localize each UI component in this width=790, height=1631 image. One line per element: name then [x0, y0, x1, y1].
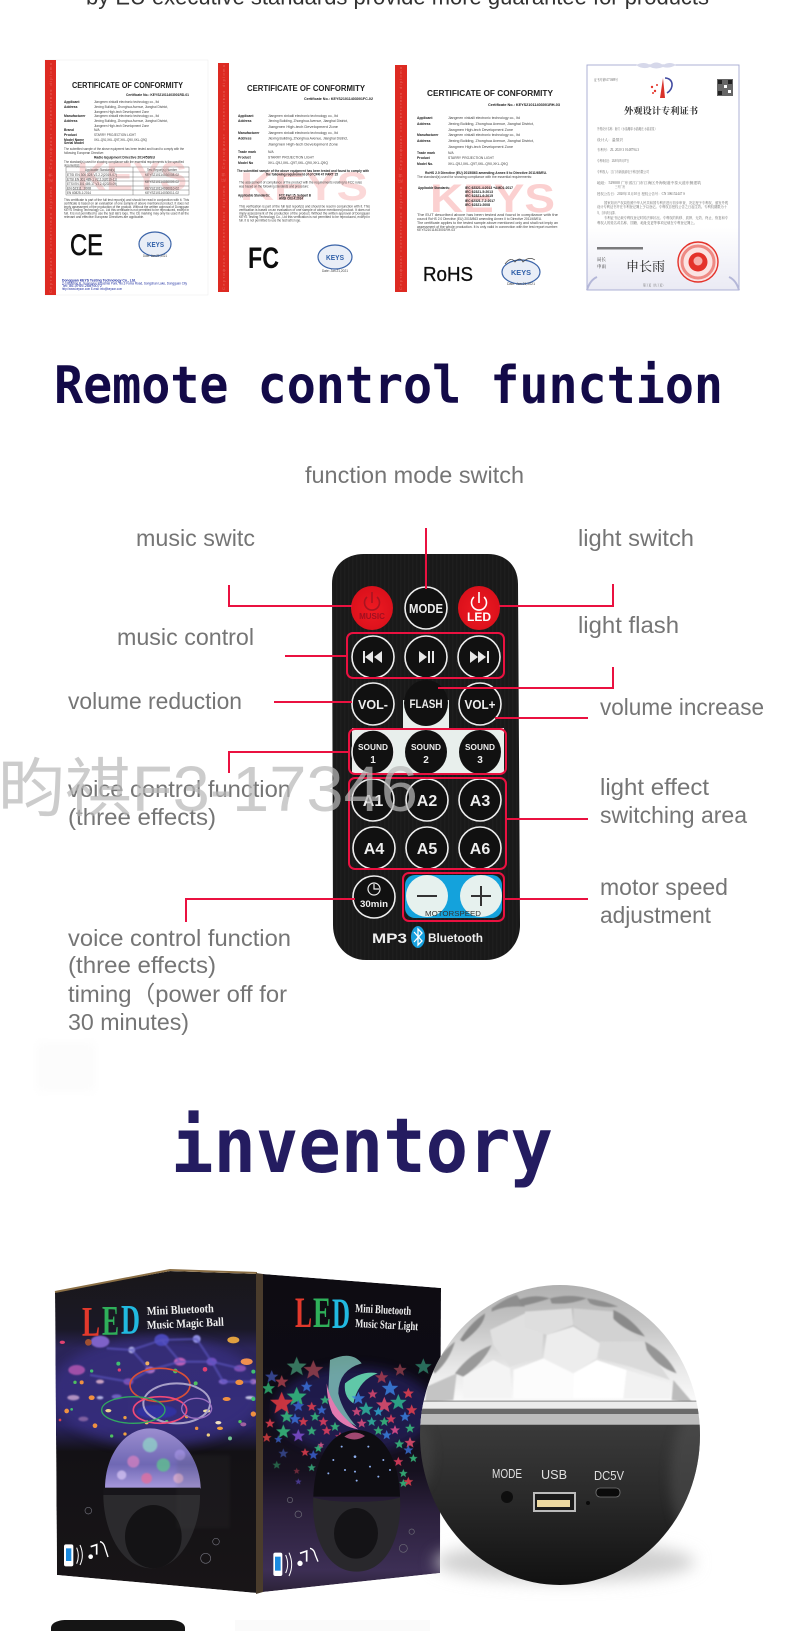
- certificate: RoHS: XKL-Q9J,XKL-Q9T,XKL-Q9X,XKL-Q9Q: [448, 162, 508, 166]
- certificate: FCC: Product: [238, 156, 252, 160]
- certificate: design patent: 设计专利证书并在专利登记簿上予以登记。专利权自授权公告之日起生效。专利权期限为十: [597, 204, 727, 209]
- lamp shadow: [435, 1542, 695, 1582]
- certificate: CE: KEYS: [147, 242, 164, 249]
- leader: timer: [186, 899, 355, 922]
- certificate: CE: Jiexing Building, Zhonghua Avenue, Jianghai District,: [94, 105, 168, 109]
- certificate: FCC: KEYS: [326, 255, 344, 262]
- certificate: CE: Brand: [64, 128, 74, 132]
- certificate: RoHS: Jiangmen High-tech Development Zone: [448, 128, 513, 132]
- certificate: RoHS: Address: [417, 139, 431, 143]
- label: function mode switch: function mode switch: [305, 462, 524, 488]
- box right logo: Mini Bluetooth: [355, 1301, 412, 1318]
- button: next: [458, 636, 500, 678]
- certificate: CE: ETSI EN 301 489-17 V3.2.4(2020-09): [67, 182, 117, 186]
- certificate: CE: CE: [70, 229, 103, 262]
- button: mode: [405, 587, 447, 629]
- button: A1: A1: [363, 793, 383, 810]
- certificate: CE: imply assessment of the production of the product. Without the written approval of Dongguan: [64, 205, 189, 209]
- certificate: design patent: 专利申请日：2020年05月07日: [597, 158, 629, 163]
- certificate: FCC: verification is based on an evaluation of one sample of above mentioned product. It does not: [239, 208, 370, 212]
- black base: [420, 1424, 700, 1585]
- noise panel: [176, 1455, 200, 1488]
- box left logo: Mini Bluetooth: [147, 1301, 214, 1318]
- label: light switch: light switch: [578, 525, 694, 551]
- certificate: CE: Product: [64, 133, 78, 137]
- egg on box left: [103, 1428, 201, 1568]
- button: A3: A3: [470, 793, 490, 810]
- certificate: design patent: 国家知识产权局依照中华人民共和国专利法进行初步审查，决定授予专利权，颁发外观: [604, 200, 728, 205]
- certificate: FCC: FC: [248, 242, 279, 275]
- certificate: RoHS: KEYS: [511, 270, 531, 277]
- certificate: CE: Tel: 86-0769-26676072: [62, 284, 102, 288]
- projected stars: [262, 1357, 432, 1487]
- certificate: CE: Jiangmen xinkaili electronic technology co., ltd: [94, 114, 159, 118]
- box right logo: D: [332, 1291, 350, 1338]
- certificate: FCC: Manufacturer: [238, 131, 260, 135]
- label: voice control function, three effects: (three effects): [68, 804, 216, 830]
- button: music: [351, 586, 393, 630]
- certificate: design patent: 证书号第6171689号: [594, 77, 618, 82]
- phone and music icon: [64, 1542, 108, 1566]
- mode button: [501, 1491, 513, 1503]
- certificate: RoHS: Jiexing Building, Zhonghua Avenue, Jianghai District,: [448, 139, 534, 143]
- certificate: CE: Applicant: [64, 100, 80, 104]
- certificate: RoHS: Address: [417, 122, 431, 126]
- button: sound 3: SOUND: [465, 742, 495, 752]
- bubbles: [85, 1507, 219, 1563]
- port labels: MODE: [492, 1466, 522, 1481]
- button: A2: A2: [417, 793, 437, 810]
- certificate: CE: EN 60825-1:2014: [67, 191, 91, 195]
- motor speed control: [405, 875, 502, 918]
- box: music control: [347, 633, 504, 678]
- certificate: CE: Applicable Standard(s): [85, 168, 115, 172]
- button: A6: A6: [470, 841, 490, 858]
- certificate: CE: The standard(s) used for showing compliance with the essential requirements is the specified: [64, 160, 184, 164]
- certificate: CE: The submitted sample of the above equipment has been tested and found to comply with the: [64, 147, 184, 151]
- indicator dot: [586, 1501, 590, 1505]
- leader: motor speed: [504, 898, 588, 900]
- certificate: FCC: Applicable Standards:: [238, 194, 270, 198]
- certificate: CE: Model Name: [64, 138, 84, 142]
- certificate: RoHS: The standard(s) used for showing compliance with the essential requirements:: [417, 175, 532, 179]
- certificate: CE: Jiexing Building, Zhonghua Avenue, Jianghai District,: [94, 119, 168, 123]
- bubbles: [287, 1497, 414, 1552]
- button: vol minus: VOL-: [358, 697, 388, 712]
- bright light dots: [59, 1337, 256, 1440]
- certificate: CE: certificate is based on an evaluation of one sample of above mentioned product. It does not: [64, 202, 189, 206]
- watermark: 昀祺F3-17346: [0, 753, 418, 825]
- MP3 Bluetooth logo: Bluetooth: [428, 933, 483, 945]
- label: voice control and timing: (three effects): [68, 952, 216, 978]
- certificate: FCC: Model No: [238, 161, 253, 165]
- certificate: FCC: CERTIFICATE OF CONFORMITY: [247, 84, 366, 93]
- certificate: RoHS: Jiexing Building, Zhonghua Avenue, Jianghai District,: [448, 122, 534, 126]
- certificate: CE: following European Directive:: [64, 151, 104, 155]
- certificate: RoHS: The certificate applies to the tested sample above mentioned only and shall not imply an: [417, 221, 558, 225]
- button: previous: [352, 636, 394, 678]
- certificate: design patent: 申长雨: [626, 256, 665, 275]
- certificate: RoHS: assessment of the whole production. It is only valid in connection with the test report number:: [417, 225, 558, 229]
- certificate: RoHS: RoHS: [423, 264, 473, 286]
- button: minus: [406, 875, 448, 917]
- certificate: RoHS: IEC 62321-5:2013: [465, 190, 493, 194]
- button: vol plus: VOL+: [464, 697, 496, 712]
- button: sound 1: 1: [370, 755, 376, 766]
- heading: Remote control function: Remote control function: [54, 356, 723, 416]
- box right logo: E: [313, 1290, 331, 1337]
- certificate: CE: http://www.keyscn.com E-mail: info@keyscn.com: [62, 287, 122, 291]
- certificate: CE: Manufacturer: [64, 114, 86, 118]
- certificate: design patent: 专利号：ZL 2020 3 0148794.3: [597, 147, 639, 152]
- certificate: RoHS: [395, 65, 560, 292]
- certificate: CE: Address: [64, 105, 78, 109]
- certificate: design patent: 第 1 页（共 1 页）: [643, 282, 665, 288]
- certificate: RoHS: Product: [417, 156, 431, 160]
- button: vol minus: [352, 683, 394, 725]
- music control group: [352, 636, 500, 678]
- label: volume increase: volume increase: [600, 694, 764, 720]
- certificate: CE: XKL-Q9J,XKL-Q9T,XKL-Q9X,XKL-Q9Q: [94, 138, 147, 142]
- box right logo: [295, 1290, 418, 1338]
- certificate: CE: Radio Equipment Directive 2014/53/EU: [94, 156, 156, 160]
- certificate: FCC: Certificate No.: KEYS21011403001FC-02: [304, 97, 373, 101]
- certificate: FCC: The assessment of compliance of the product with the requirements relating to FCC rules: [239, 180, 362, 184]
- label: volume reduction: volume reduction: [68, 688, 242, 714]
- button: flash: FLASH: [410, 697, 442, 711]
- panel: certificates: [45, 60, 739, 295]
- certificate: design patent: 专利权人：江门市新凯丽电子科技有限公司: [597, 169, 649, 174]
- certificate: FCC: Applicant: [238, 114, 254, 118]
- label: motor speed adjustment: motor speed: [600, 874, 728, 900]
- label: music switc: music switc: [136, 525, 255, 551]
- certificate: FCC: The submitted sample of the above equipment has been tested and found to comply with: [237, 169, 369, 173]
- certificate: RoHS: Certificate No.: KEYS21011403001RH-03: [488, 103, 560, 107]
- certificate: RoHS: Applicant: [417, 116, 433, 120]
- pale backing strip: [352, 700, 504, 773]
- QR code: [717, 79, 733, 96]
- usb port: [533, 1492, 576, 1512]
- leader: music switch: [229, 585, 352, 606]
- next section: faint panel: [235, 1620, 430, 1631]
- button: 30min timer: [353, 876, 395, 918]
- certificate: CE: [45, 60, 208, 295]
- certificate: CE: full. It is not permitted to use the test lab's logo. The CE marking may only be used if all the: [64, 212, 189, 216]
- button: sound 2: 2: [423, 755, 429, 766]
- certificate: RoHS: council RoHS 2.0 Directive (EU) 2015/863 amending Annex II to Directive 2011/65/EU.: [417, 217, 542, 221]
- certificate: FCC: FCC Part 15, Subpart B: [279, 194, 311, 198]
- callout boxes and leader lines: [186, 528, 613, 922]
- button: sound 2: SOUND: [411, 742, 441, 752]
- leader: function mode: [425, 528, 427, 589]
- certificate: CE: relevant and effective European Directives are applicable.: [64, 215, 144, 219]
- label: voice control function, three effects: [68, 776, 291, 830]
- certificate: RoHS: IEC 62321-4:2013 +AMD1:2017: [465, 186, 513, 190]
- certificate: RoHS: KEYS: [430, 177, 555, 221]
- button: sound 3: [459, 730, 501, 774]
- certificate: FCC: Jiangmen xinkaili electronic technology co., ltd: [268, 131, 338, 135]
- certificate: FCC: Jiangmen High-tech Development Zone: [268, 125, 338, 129]
- certificate: RoHS: Jiangmen xinkaili electronic technology co., ltd: [448, 116, 520, 120]
- box left logo: Music Magic Ball: [147, 1315, 225, 1332]
- button: vol plus: [459, 683, 501, 725]
- button: flash: [404, 680, 448, 726]
- certificate: RoHS: N/A: [448, 151, 454, 155]
- certificate: FCC: Trade mark: [238, 150, 256, 154]
- certificate: FCC: Jiangmen High-tech Development Zone: [268, 142, 338, 146]
- leader: volume reduction: [274, 701, 352, 703]
- certificate: CE: N/A: [94, 128, 100, 132]
- certificate: CE: 2-3 Building B, Guangyue Industrial Park, No.3 Fuma Road, Songshan Lake, Dongguan City: [62, 282, 187, 286]
- leader: light flash: [438, 667, 613, 688]
- certificate: design patent: [587, 62, 739, 290]
- certificate: FCC: KEYS: [240, 165, 368, 209]
- box: light effects: [349, 778, 506, 869]
- rim bands: [417, 1401, 703, 1402]
- egg lamp: [407, 1283, 717, 1588]
- certificate: RoHS: RoHS 2.0 Directive (EU) 2015/863 amending Annex II to Directive 2011/65/EU.: [425, 171, 547, 175]
- MP3 Bluetooth logo: MP3: [372, 930, 407, 946]
- button: sound 3: 3: [477, 755, 483, 766]
- box edge: [256, 1273, 263, 1594]
- certificate: design patent: 设计人：温情贝: [597, 137, 623, 142]
- certificate: CE: KEYS210114030010-02: [145, 186, 179, 190]
- button: A5: [406, 827, 448, 869]
- label: voice control and timing: voice control function: [68, 925, 291, 951]
- certificate: CE: Jiangmen xinkaili electronic technology co., ltd: [94, 100, 159, 104]
- certificate: design patent: 年，自申请日起算。: [597, 210, 617, 215]
- certificate: CE: Serial Model: [64, 141, 84, 145]
- button: A6: [459, 827, 501, 869]
- certificate: FCC: was based on the following standards and procedure:: [239, 184, 309, 188]
- button: music: MUSIC: [359, 612, 385, 621]
- certificate: design patent: 申雨: [597, 263, 606, 270]
- certificate: FCC: the following requirement of of CFR 47 PART 15: [266, 172, 338, 176]
- certificate: FCC: XKL-Q9J,XKL-Q9T,XKL-Q9X,XKL-Q9Q: [268, 161, 328, 165]
- certificate: FCC: N/A: [268, 150, 274, 154]
- box: sound: [349, 729, 506, 774]
- button: sound 1: SOUND: [358, 742, 388, 752]
- certificate: CE: Сертификат соответствия diploma 证书 Сертификат соответствия diploma: [47, 62, 53, 293]
- next section: dark object top: [51, 1620, 185, 1631]
- certificate: FCC: KEYS Testing Technology Co., Ltd this verification is not permitted to be reproduced, except in: [239, 215, 370, 219]
- certificate: design patent: 地址：529000 广东省江门市江海区外海街道中泰大道东侧建筑: [597, 180, 701, 185]
- certificate: CE: ETSI EN 300 328 V2.2.2(2019-07): [67, 173, 117, 177]
- star field glow: [275, 1367, 435, 1453]
- box right logo: L: [295, 1290, 312, 1337]
- certificate: design patent: 专利证书记载专利权登记时的法律状况。专利权的转移、质押、无效、终止、恢复和专: [604, 215, 728, 220]
- faint patch: [36, 1042, 96, 1092]
- button: A4: [353, 827, 395, 869]
- box left logo: [82, 1298, 225, 1346]
- certificate: FCC: Date: Jan.21,2021: [322, 269, 348, 273]
- certificate: RoHS: IEC 62321:2008: [465, 203, 490, 207]
- motor speed control: MOTORSPEED: [425, 911, 481, 918]
- label: light effect switching area: switching area: [600, 802, 747, 828]
- button: plus: [460, 875, 502, 917]
- remote body: [332, 554, 520, 960]
- certificate: RoHS: CERTIFICATE OF CONFORMITY: [427, 89, 554, 98]
- certificate: RoHS: STARRY PROJECTION LIGHT: [448, 156, 494, 160]
- certificate: FCC: Jiexing Building, Zhonghua Avenue, Jianghai District,: [268, 136, 348, 140]
- certificate: CE: Certificate No.: KEYS21011403001RD-01: [126, 93, 189, 97]
- heading: inventory: inventory: [171, 1101, 553, 1190]
- certificate: CE: Dongguan KEYS Testing Technology Co., Ltd.: [62, 278, 136, 282]
- button: sound 2: [405, 730, 447, 774]
- button: A4: A4: [364, 841, 384, 858]
- certificate: CE: ETSI EN 301 489-1 V2.2.3(2019-11): [67, 178, 117, 182]
- official seal: [678, 242, 718, 282]
- leader: music control: [285, 655, 347, 657]
- certificate: design patent: 局长: [597, 256, 606, 263]
- label: voice control and timing: timing（power off for: [68, 981, 287, 1007]
- certificate: FCC: Address: [238, 119, 252, 123]
- certificate: RoHS: Trade mark: [417, 151, 435, 155]
- egg on box right: [313, 1430, 400, 1572]
- product box: [50, 1270, 441, 1594]
- certificate: CE: KEYS210114030008-02: [145, 173, 179, 177]
- certificate: CE: KEYS210114030011-02: [145, 191, 179, 195]
- leader: volume increase: [495, 717, 588, 719]
- certificate: CE: KEYS210114030009-02: [145, 180, 179, 184]
- port labels: [492, 1466, 624, 1483]
- certificate: FCC: STARRY PROJECTION LIGHT: [268, 156, 314, 160]
- certificate: FCC: Сертификат соответствия diploma 证书 Сертификат соответствия diploma: [220, 64, 226, 290]
- certificate: RoHS: Applicable Standards:: [418, 186, 450, 190]
- certificate: design patent: 外观设计名称：射灯（水晶魔球 水晶魔光 水晶星星）: [597, 126, 657, 131]
- button: A2: [406, 779, 448, 821]
- label: light effect switching area: [600, 774, 747, 828]
- certificate: design patent: 利权人的姓名或名称、国籍、地址变更等事项记载在专利登记簿上。: [597, 220, 697, 225]
- label: light effect switching area: light effect: [600, 774, 710, 800]
- certificate: CE: Address: [64, 119, 78, 123]
- button: mode: MODE: [409, 601, 443, 616]
- certificate: FCC: ANSI C63.4:2014: [279, 196, 303, 200]
- certificate: CE: This certificate is part of the full test report(s) and should be read in conjunction with it. This: [64, 198, 189, 202]
- certificate: CE: Jiangmen High-tech Development Zone: [94, 124, 149, 128]
- leader: sound: [229, 752, 349, 773]
- leader: light effects: [506, 818, 588, 820]
- phone and music icon: [273, 1548, 318, 1576]
- label: voice control function, three effects: voice control function: [68, 776, 291, 802]
- certificate: design patent: 外观设计专利证书: [624, 104, 699, 117]
- certificate: design patent: 三号厂房: [615, 184, 625, 189]
- certificate: FCC: imply assessment of the production of the product. Without the written approval of Dongguan: [239, 212, 370, 216]
- certificate: CE: KEYS Testing Technology Co., Ltd this certificate is not permitted to be reproduced, except in: [64, 208, 189, 212]
- certificate: FCC: This verification is part of the full test report(s) and should be read in conjunction with it. This: [239, 204, 370, 208]
- certificate: RoHS: IEC 62321-6:2015: [465, 194, 493, 198]
- crystal dome: [417, 1283, 703, 1427]
- certificate: RoHS: The EUT described above has been tested and found in compliance with the: [417, 213, 558, 217]
- certificate: RoHS: KEYS21011403001RH-03: [417, 228, 455, 232]
- certificate: CE: EN 62311: 2008: [67, 186, 91, 190]
- certificate: CE: Date: Jan.21,2021: [143, 254, 167, 258]
- certificate: design patent: 授权公告日：2020年11月10日 授权公告号：CN 306152447 S: [597, 191, 685, 196]
- certificate: RoHS: Date: Jan.21,2021: [507, 282, 535, 286]
- label: light flash: light flash: [578, 612, 679, 638]
- label: motor speed adjustment: [600, 874, 728, 928]
- label: voice control and timing: [68, 925, 291, 1035]
- box left face: [50, 1271, 263, 1593]
- certificate: CE: KEYS: [77, 155, 187, 199]
- leader: light switch: [499, 584, 613, 606]
- crescent swirl: [327, 1356, 378, 1429]
- box right face: [262, 1274, 441, 1592]
- button: A1: [352, 779, 394, 821]
- certificate: RoHS: IEC 62321-7-2:2017: [465, 199, 495, 203]
- certificate: CE: Test Report(s) Number: [147, 168, 178, 172]
- projected light glow: [50, 1337, 263, 1447]
- certificate: RoHS: Сертификат соответствия diploma 证书 Сертификат соответствия diploma: [397, 66, 403, 290]
- certificate: RoHS: Jiangmen xinkaili electronic technology co., ltd: [448, 133, 520, 137]
- button: led: LED: [467, 610, 491, 624]
- certificate: CE: CERTIFICATE OF CONFORMITY: [72, 81, 184, 90]
- box right logo: Music Star Light: [355, 1316, 418, 1333]
- certificate: FCC: Jiangmen xinkaili electronic technology co., ltd: [268, 114, 338, 118]
- certificate: CE: Jiangmen High-tech Development Zone: [94, 110, 149, 114]
- MP3 Bluetooth logo: [372, 926, 483, 948]
- sound buttons: [352, 730, 501, 774]
- micro usb port: [596, 1488, 620, 1497]
- box top edge: [55, 1270, 257, 1292]
- label: voice control and timing: 30 minutes): [68, 1009, 189, 1035]
- button: A5: A5: [417, 841, 437, 858]
- box: motor speed: [403, 873, 504, 921]
- certificate: RoHS: Jiangmen High-tech Development Zone: [448, 145, 513, 149]
- box left logo: L: [82, 1300, 100, 1346]
- box left logo: D: [121, 1298, 140, 1344]
- button: play pause: [405, 636, 447, 678]
- button: led: [458, 586, 500, 630]
- certificate: FCC: [218, 63, 373, 292]
- remote control: [332, 554, 520, 960]
- soft light blobs: [67, 1334, 257, 1421]
- port labels: USB: [541, 1467, 567, 1482]
- label: music control: music control: [117, 624, 254, 650]
- button: 30min timer: 30min: [360, 899, 388, 909]
- certificate: FCC: Jiexing Building, Zhonghua Avenue, Jianghai District,: [268, 119, 348, 123]
- certificate: FCC: full. It is not permitted to use the test lab's logo.: [239, 218, 301, 222]
- light effect buttons: [352, 779, 501, 869]
- certificate: RoHS: Model No.: [417, 162, 433, 166]
- dome facets: [425, 1295, 693, 1403]
- certificate: FCC: Address: [238, 136, 252, 140]
- button: sound 1: [352, 730, 394, 774]
- light rings: [102, 1368, 212, 1423]
- port labels: DC5V: [594, 1468, 624, 1483]
- patent logo: [651, 78, 672, 98]
- certificate: RoHS: Manufacturer: [417, 133, 439, 137]
- box left logo: E: [102, 1299, 119, 1345]
- label: motor speed adjustment: adjustment: [600, 902, 712, 928]
- certificate: CE: STARRY PROJECTION LIGHT: [94, 133, 136, 137]
- button: A3: [459, 779, 501, 821]
- certificate: CE: document(s):: [64, 164, 80, 168]
